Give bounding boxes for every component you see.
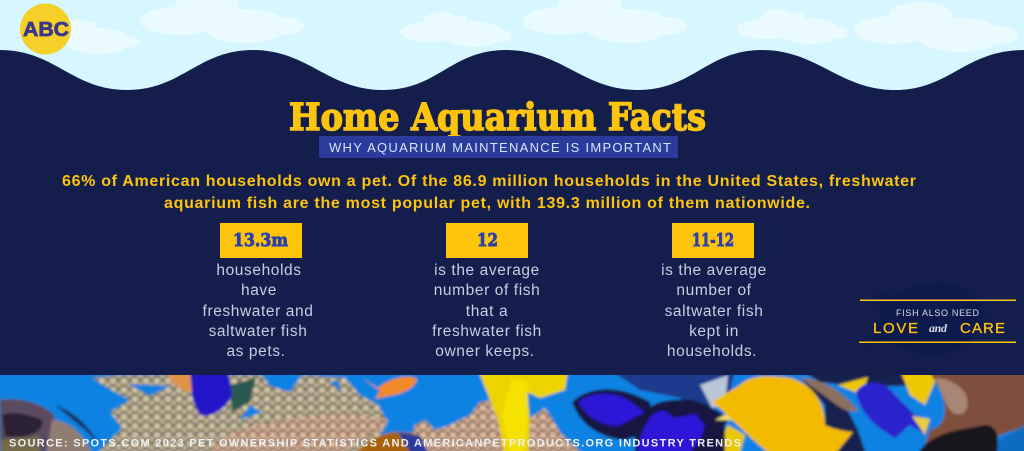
logo badge (20, 4, 71, 54)
stat: 12 freshwater fish: freshwater fish (432, 323, 542, 340)
aquarium photo strip (0, 375, 1024, 451)
rock: left (0, 399, 55, 451)
title: Home Aquarium Facts (289, 95, 706, 139)
subtitle banner (319, 136, 678, 158)
fish: top dark right (806, 375, 909, 388)
callout: love and care (859, 283, 1016, 356)
coral: warm base (205, 414, 388, 451)
stat: 13.3m households: households (216, 262, 302, 279)
fish: bottom centre (352, 432, 425, 451)
subtitle banner: WHY AQUARIUM MAINTENANCE IS IMPORTANT (329, 140, 671, 155)
stat: 13.3m households: 13.3m (233, 230, 288, 251)
fish: dim left (45, 420, 95, 451)
fish: blue tang large (572, 389, 752, 451)
stat: 11-12 saltwater fish: households. (667, 343, 757, 360)
source line: SOURCE: SPOTS.COM 2023 PET OWNERSHIP STATISTICS AND AMERICANPETPRODUCTS.ORG INDUSTRY TRENDS (9, 438, 741, 450)
coral: blue gaps (128, 380, 342, 420)
stat: 11-12 saltwater fish (661, 223, 767, 360)
fish: orange right (362, 377, 417, 399)
stat: 13.3m households (203, 223, 313, 360)
fish: yellow tang large (712, 376, 853, 451)
coral: dark green shadow (230, 378, 256, 412)
callout: love and care: FISH ALSO NEED (896, 308, 980, 318)
stat: 12 freshwater fish: number of fish (434, 282, 540, 299)
logo badge: ABC (23, 19, 69, 41)
fish: blue tang right (856, 383, 930, 438)
callout: love and care: and (929, 321, 948, 335)
sky background (0, 0, 1024, 100)
stat: 11-12 saltwater fish: saltwater fish (665, 303, 763, 320)
stat: 13.3m households: saltwater fish (209, 323, 307, 340)
stat: 12 freshwater fish: 12 (477, 230, 498, 251)
stat: 13.3m households: as pets. (226, 343, 286, 360)
stat: 12 freshwater fish (432, 223, 542, 360)
navy wave panel (0, 50, 1024, 376)
clouds (63, 0, 1018, 54)
rock: dark behind fish (616, 375, 736, 409)
stat: 11-12 saltwater fish: number of (676, 282, 752, 299)
coral: left branching colony (90, 375, 388, 451)
stat: 13.3m households: have (241, 282, 277, 299)
fish: blue tang left (190, 370, 232, 416)
intro paragraph (62, 173, 916, 212)
stat: 12 freshwater fish: is the average (434, 262, 540, 279)
stat: 11-12 saltwater fish: 11-12 (692, 230, 734, 251)
callout: love and care: LOVE (873, 320, 918, 337)
intro paragraph: aquarium fish are the most popular pet, with 139.3 million of them nationwide. (164, 195, 810, 212)
icon: fish silhouette (868, 283, 984, 356)
rock: right (923, 375, 1024, 446)
intro paragraph: 66% of American households own a pet. Of the 86.9 million households in the United States, freshwater (62, 173, 916, 190)
fish: yellow lower (722, 423, 748, 451)
stat: 11-12 saltwater fish: kept in (689, 323, 739, 340)
callout: love and care: CARE (960, 320, 1005, 337)
fish: orange left (165, 370, 192, 392)
stat: 13.3m households: freshwater and (203, 303, 313, 320)
stat: 12 freshwater fish: that a (466, 303, 508, 320)
stat: 11-12 saltwater fish: is the average (661, 262, 767, 279)
fish: yellow right back (838, 370, 940, 405)
stat: 12 freshwater fish: owner keeps. (435, 343, 535, 360)
fish: yellow back (478, 370, 568, 451)
fish: dark behind right (800, 378, 868, 451)
coral: right colony (405, 400, 590, 451)
